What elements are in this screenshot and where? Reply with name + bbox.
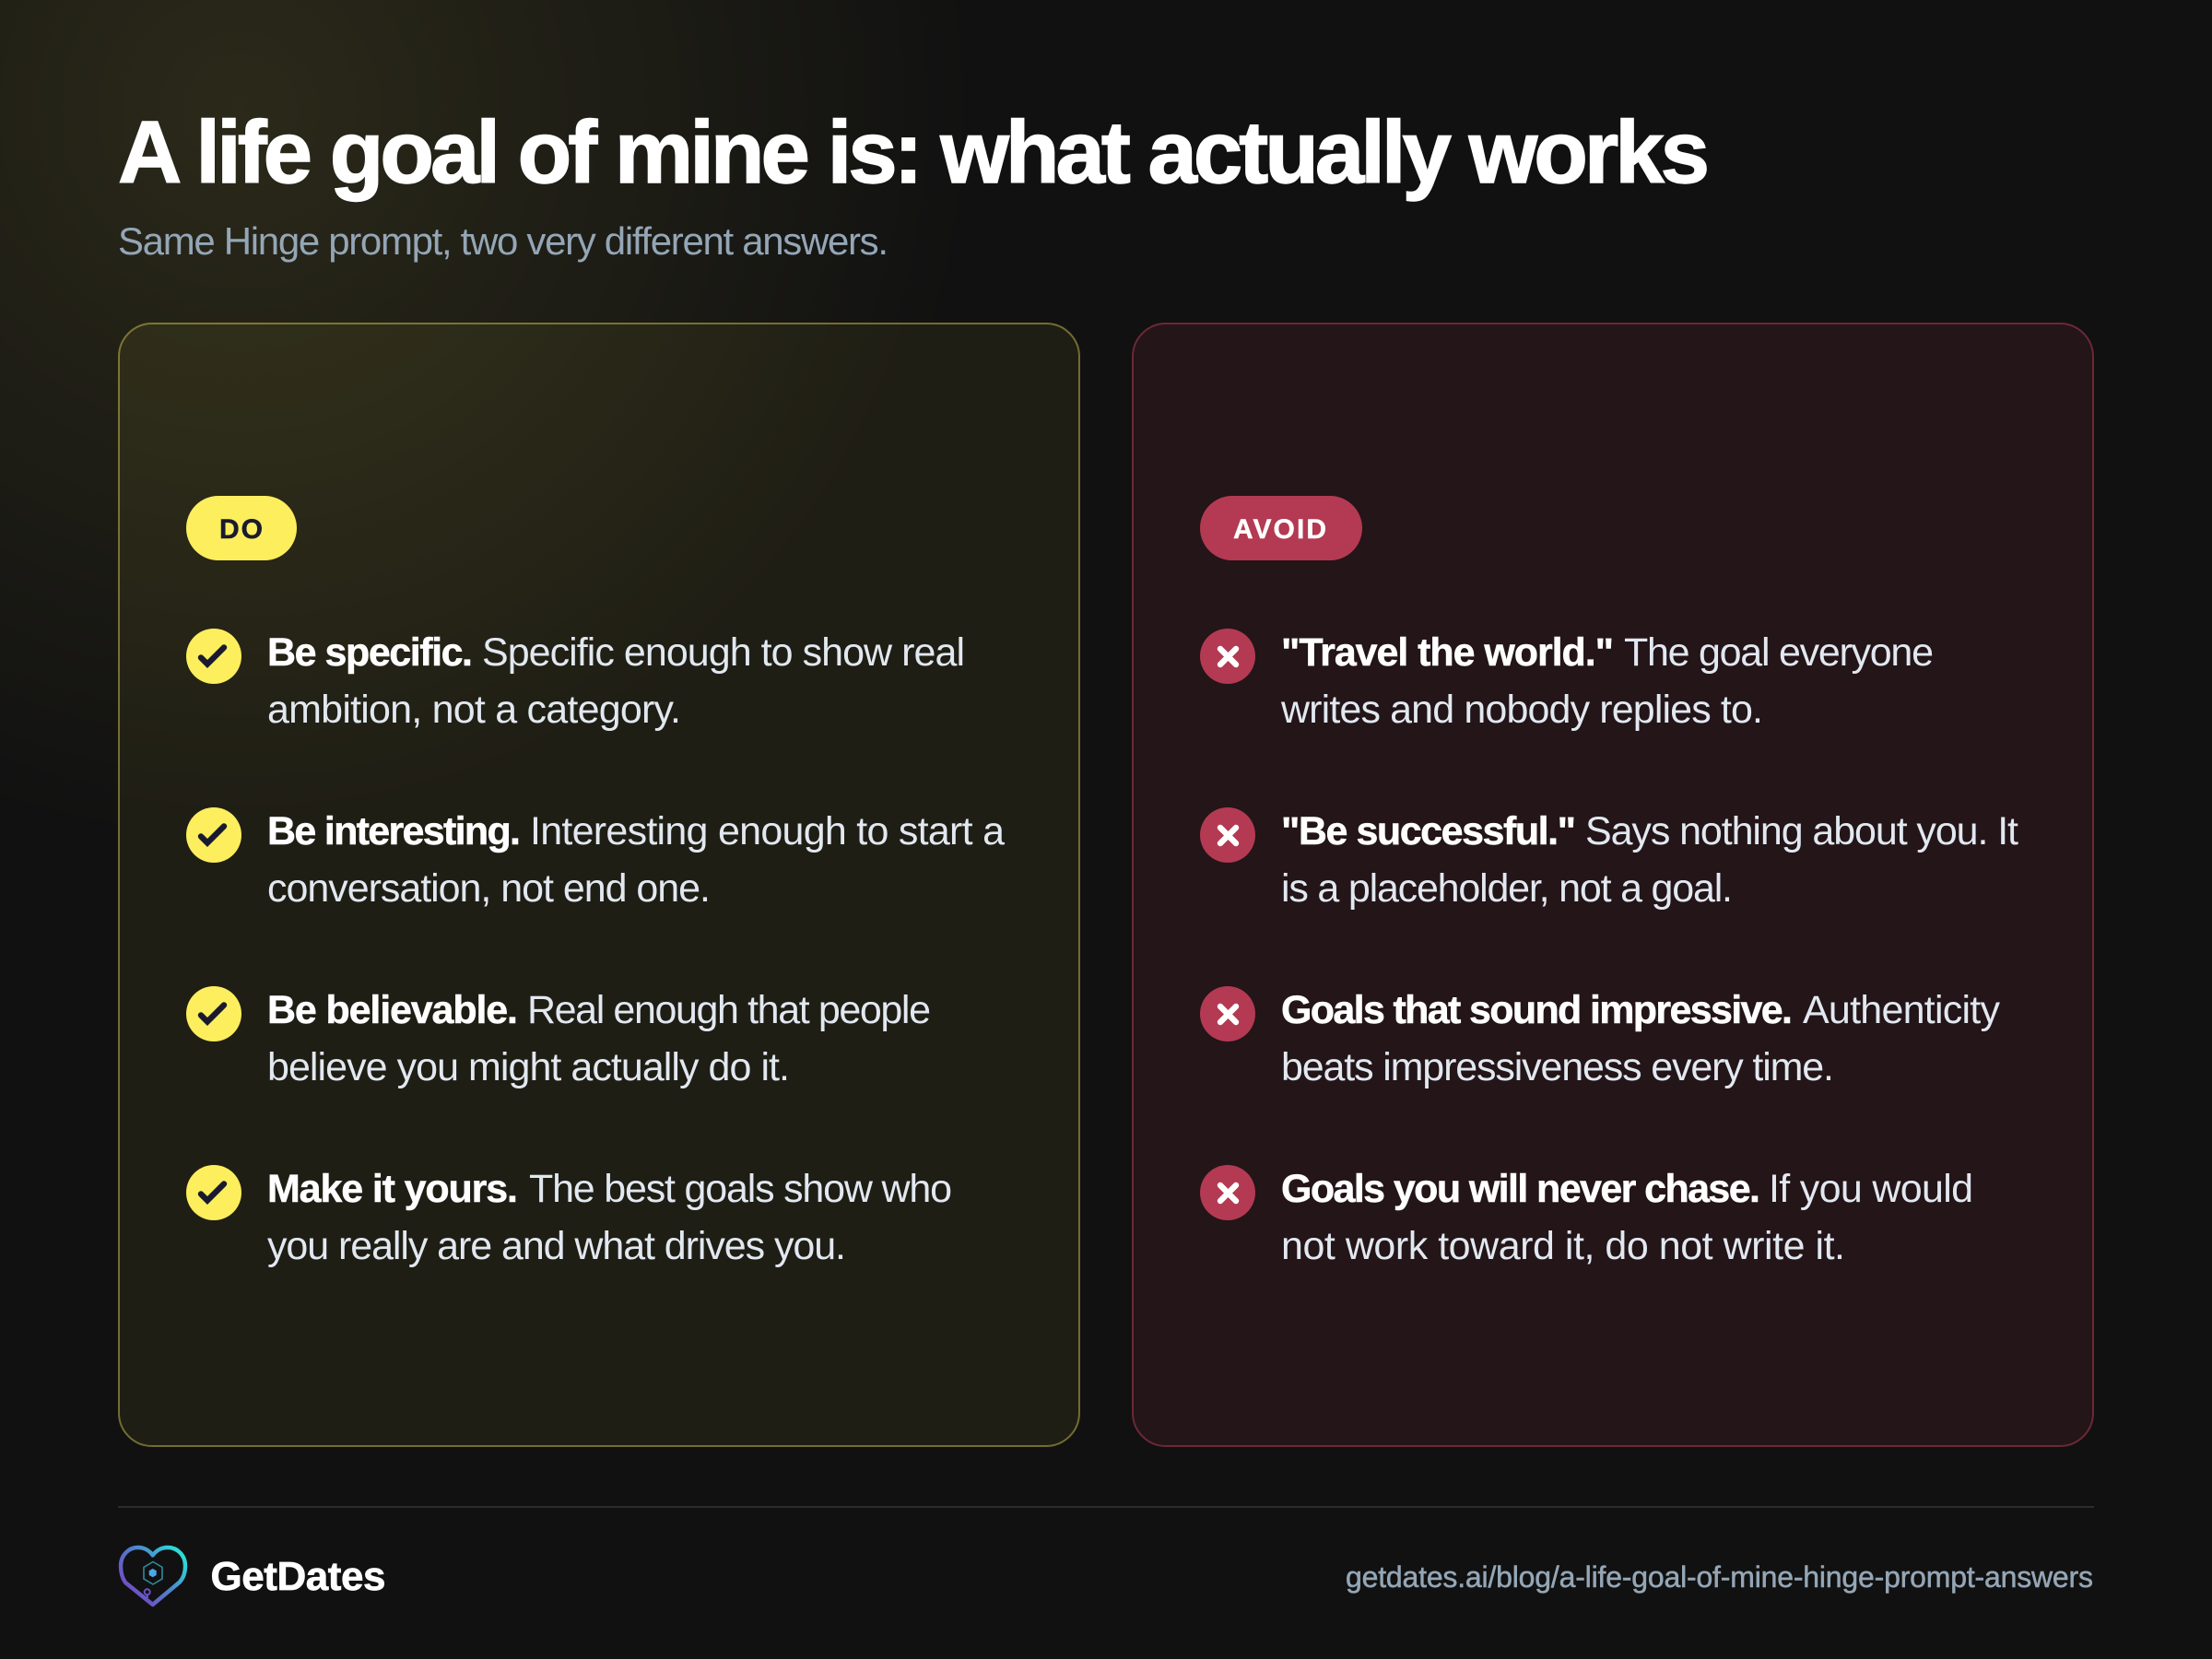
- do item 1: [186, 629, 965, 732]
- subtitle: Same Hinge prompt, two very different answers.: [118, 219, 888, 263]
- footer brand name: GetDates: [210, 1554, 385, 1599]
- avoid item 1: The goal everyone: [1624, 630, 1934, 675]
- do item 4: you really are and what drives you.: [267, 1224, 846, 1268]
- avoid item 1: [1200, 629, 1934, 732]
- do item 3: Be believable.: [267, 988, 518, 1032]
- avoid item 2: [1200, 807, 2018, 911]
- avoid panel background: [1133, 324, 2093, 1446]
- avoid item 3: Goals that sound impressive.: [1281, 988, 1793, 1032]
- do item 4: The best goals show who: [529, 1167, 952, 1211]
- avoid item 4: If you would: [1769, 1167, 1973, 1211]
- footer url: getdates.ai/blog/a-life-goal-of-mine-hinge-prompt-answers: [1346, 1560, 2093, 1594]
- avoid item 2: is a placeholder, not a goal.: [1281, 866, 1733, 911]
- do item 3: believe you might actually do it.: [267, 1045, 790, 1089]
- do item 3: [186, 986, 931, 1089]
- do item 1: ambition, not a category.: [267, 688, 681, 732]
- do panel background: [119, 324, 1079, 1446]
- avoid item 4: [1200, 1165, 1973, 1268]
- avoid item 3: beats impressiveness every time.: [1281, 1045, 1834, 1089]
- do item 2: [186, 807, 1005, 911]
- footer logo: heart icon: [121, 1547, 185, 1605]
- do item 1: Be specific.: [267, 630, 473, 675]
- avoid item 2: Says nothing about you. It: [1585, 809, 2018, 853]
- panel: do: [119, 324, 1079, 1446]
- avoid badge: [1200, 496, 1362, 560]
- avoid item 3: [1200, 986, 2000, 1089]
- do item 4: [186, 1165, 952, 1268]
- do item 1: Specific enough to show real: [482, 630, 965, 675]
- do item 3: Real enough that people: [527, 988, 931, 1032]
- avoid item 1: "Travel the world.": [1281, 630, 1614, 675]
- avoid item 3: Authenticity: [1803, 988, 2000, 1032]
- avoid item 1: writes and nobody replies to.: [1280, 688, 1763, 732]
- do item 2: conversation, not end one.: [267, 866, 711, 911]
- do badge: DO: [219, 514, 263, 545]
- avoid item 2: "Be successful.": [1281, 809, 1576, 853]
- avoid item 4: not work toward it, do not write it.: [1281, 1224, 1845, 1268]
- title: A life goal of mine is: what actually works: [118, 103, 1710, 202]
- do badge: [186, 496, 297, 560]
- do item 4: Make it yours.: [267, 1167, 518, 1211]
- do item 2: Be interesting.: [267, 809, 521, 853]
- avoid badge: AVOID: [1233, 514, 1326, 545]
- avoid item 4: Goals you will never chase.: [1281, 1167, 1760, 1211]
- do item 2: Interesting enough to start a: [530, 809, 1005, 853]
- panel: avoid: [1133, 324, 2093, 1446]
